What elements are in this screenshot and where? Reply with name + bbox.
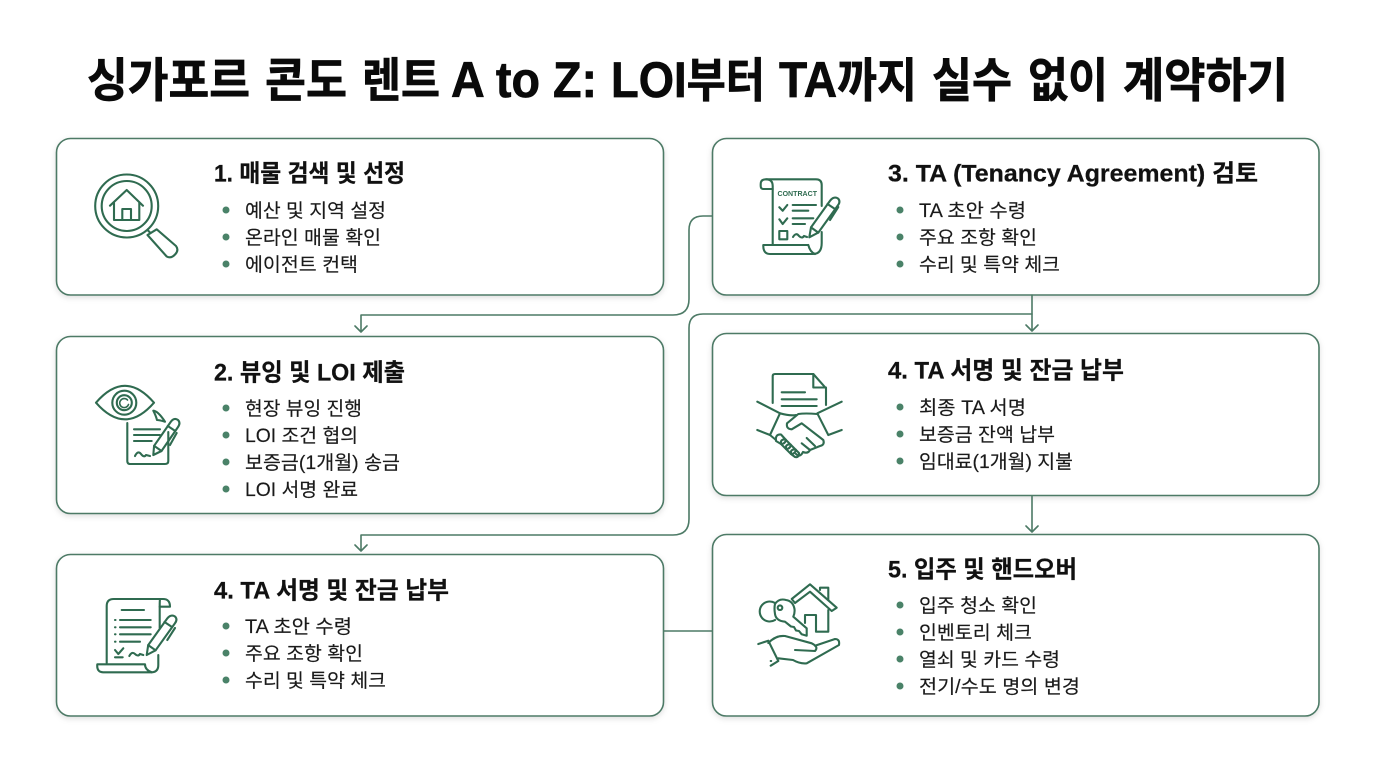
- list: step 2: 현장 뷰잉 진행: [245, 398, 362, 420]
- heading: step 3: 3. TA (Tenancy Agreement) 검토: [888, 160, 1258, 188]
- list: step 1: 예산 및 지역 설정: [245, 200, 386, 222]
- title: TA까지: [779, 52, 917, 108]
- heading: step 1: 1. 매물 검색 및 선정: [214, 160, 405, 188]
- list: step 2: 보증금(1개월) 송금: [245, 452, 400, 474]
- panel: step 3: [712, 138, 1319, 295]
- panel: step 2: [56, 336, 664, 514]
- arrow: step 3 to step 2: [355, 216, 712, 332]
- icon: magnifier with house: [95, 174, 177, 257]
- arrow: step 3 to step 4 signing: [1026, 295, 1038, 331]
- icon: handshake and document: [757, 374, 842, 457]
- list: step 4 review: 수리 및 특약 체크: [245, 670, 386, 692]
- list: step 4 signing: 임대료(1개월) 지불: [919, 451, 1073, 473]
- arrow: step 4 signing to step 5: [1026, 496, 1038, 532]
- heading: step 2: 2. 뷰잉 및 LOI 제출: [214, 360, 405, 386]
- icon: eye and document: [96, 386, 179, 464]
- icon: document with pen: [97, 599, 176, 672]
- panel: step 4 signing: [712, 334, 1319, 496]
- heading: step 4 review: 4. TA 서명 및 잔금 납부: [214, 578, 449, 604]
- icon: contract scroll: CONTRACT: [778, 189, 817, 198]
- title: LOI부터: [611, 52, 765, 108]
- panel: step 4 review: [56, 554, 664, 716]
- title: 실수: [932, 54, 1012, 107]
- panel: step 1: [56, 138, 664, 295]
- heading: step 4 signing: 4. TA 서명 및 잔금 납부: [888, 358, 1124, 384]
- list: step 4 signing: [896, 397, 1073, 473]
- list: step 5: 열쇠 및 카드 수령: [919, 649, 1060, 671]
- icon: contract scroll: [761, 179, 839, 254]
- list: step 4 signing: 최종 TA 서명: [919, 397, 1026, 419]
- list: step 5: [896, 595, 1080, 698]
- list: step 2: LOI 서명 완료: [245, 479, 358, 501]
- list: step 4 review: [222, 616, 386, 692]
- title: 콘도: [265, 54, 347, 107]
- list: step 5: 입주 청소 확인: [919, 595, 1037, 617]
- list: step 2: LOI 조건 협의: [245, 425, 358, 447]
- connector: step 4 review to step 5: [664, 630, 712, 632]
- title: A to Z:: [451, 52, 597, 108]
- icon: keys house and hand: [758, 584, 839, 666]
- panel: step 5: [712, 534, 1319, 716]
- list: step 1: 에이전트 컨택: [245, 254, 358, 276]
- list: step 3: 수리 및 특약 체크: [919, 254, 1060, 276]
- arrow: step 3 branch to step 4 review: [355, 314, 1032, 551]
- title: 계약하기: [1123, 54, 1288, 107]
- list: step 1: [222, 200, 386, 276]
- list: step 5: 전기/수도 명의 변경: [919, 676, 1080, 698]
- list: step 4 signing: 보증금 잔액 납부: [919, 424, 1055, 446]
- title: [87, 52, 1288, 108]
- list: step 1: 온라인 매물 확인: [245, 227, 381, 249]
- list: step 2: [222, 398, 400, 501]
- list: step 4 review: TA 초안 수령: [245, 616, 352, 638]
- list: step 3: TA 초안 수령: [919, 200, 1026, 222]
- list: step 5: 인벤토리 체크: [919, 622, 1032, 644]
- list: step 3: 주요 조항 확인: [919, 227, 1037, 249]
- list: step 3: [896, 200, 1060, 276]
- list: step 4 review: 주요 조항 확인: [245, 643, 363, 665]
- title: 렌트: [362, 54, 440, 107]
- title: 싱가포르: [87, 54, 250, 107]
- heading: step 5: 5. 입주 및 핸드오버: [888, 556, 1077, 584]
- title: 없이: [1028, 54, 1108, 107]
